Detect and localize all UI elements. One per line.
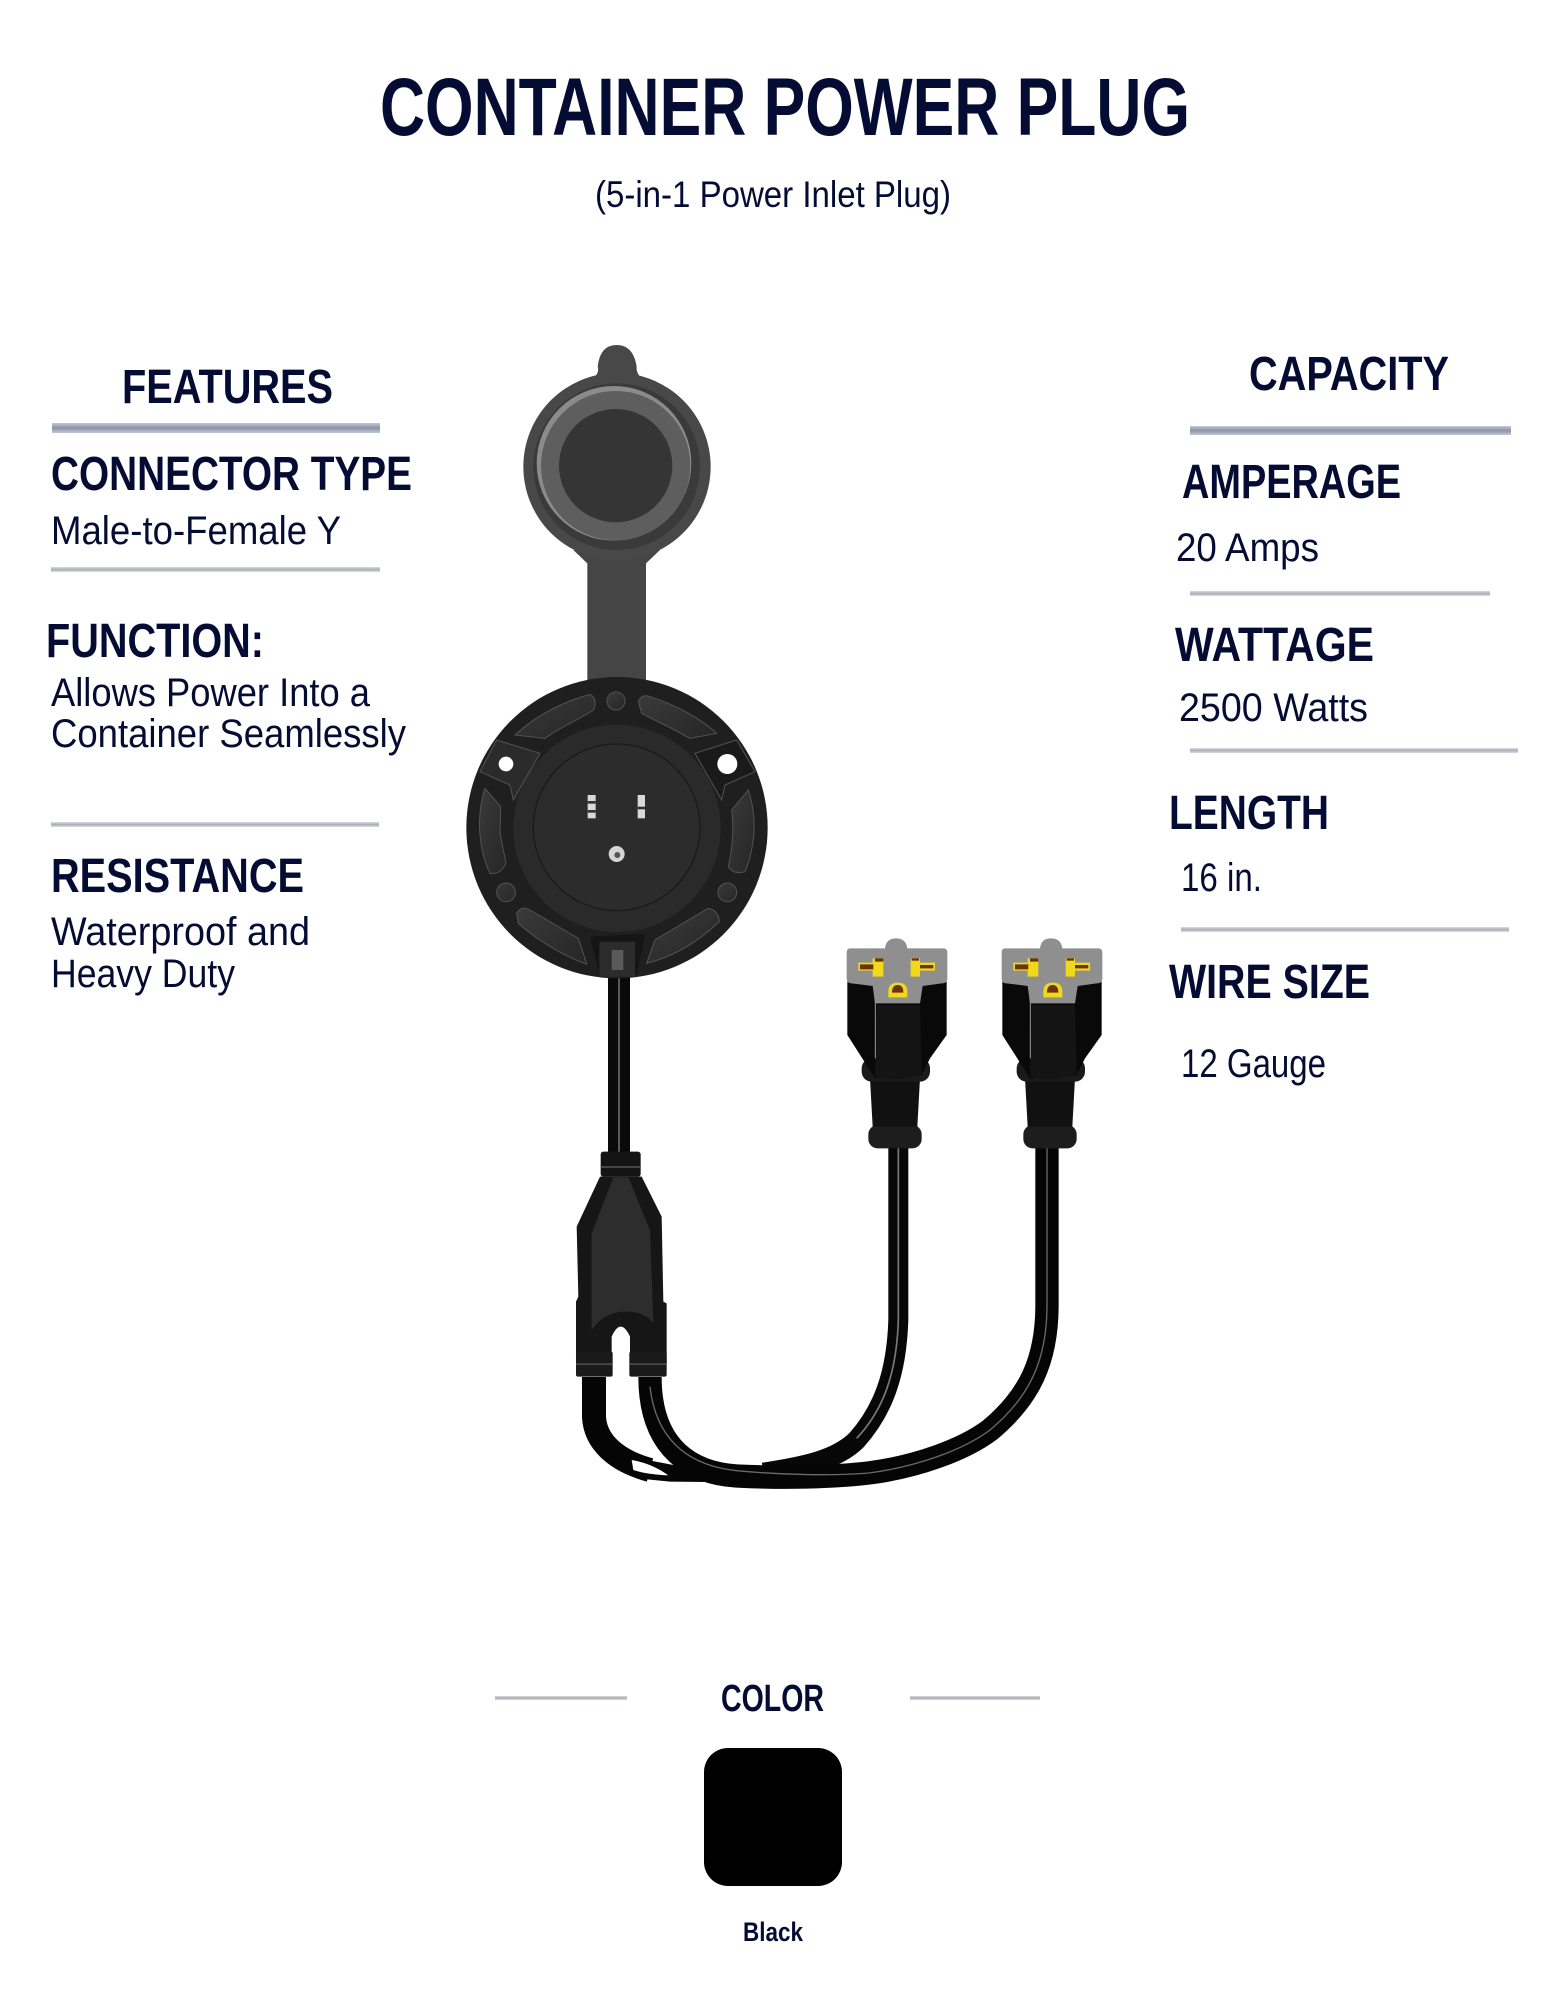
icon: plug 1: [847, 938, 947, 1148]
cords: [619, 973, 1047, 1477]
capacity: wattage: [1175, 619, 1374, 730]
capacity: length: [1169, 787, 1329, 900]
color name: Black: [743, 1917, 804, 1947]
cap disc: [523, 373, 711, 560]
feature: connector type: [51, 448, 412, 553]
cap tab: [595, 345, 640, 377]
feature: function: Allows Power Into a: [51, 671, 371, 715]
capacity: wattage: WATTAGE: [1175, 619, 1374, 672]
capacity: amperage: 20 Amps: [1176, 526, 1319, 570]
color heading: COLOR: [721, 1678, 824, 1720]
feature: connector type: CONNECTOR TYPE: [51, 448, 412, 501]
mounting holes: [499, 754, 737, 774]
socket pins: [588, 795, 645, 862]
panel: features: [46, 361, 412, 996]
icon: inlet cap and strap: [523, 345, 711, 683]
feature: function: FUNCTION:: [46, 615, 264, 668]
feature: function: [46, 615, 406, 756]
feature: resistance: Waterproof and: [51, 910, 310, 954]
capacity: amperage: [1176, 456, 1401, 570]
feature: resistance: Heavy Duty: [51, 952, 235, 996]
slots and mounts: [479, 692, 755, 964]
subtitle: (5-in-1 Power Inlet Plug): [595, 174, 951, 215]
capacity: wire size: WIRE SIZE: [1169, 956, 1370, 1009]
panel: capacity: [1169, 348, 1518, 1086]
capacity heading: CAPACITY: [1249, 348, 1449, 401]
feature: resistance: [51, 850, 310, 996]
junction body: [576, 1152, 667, 1377]
panel: color: [495, 1678, 1040, 1947]
capacity: wire size: [1169, 956, 1370, 1086]
feature: connector type: Male-to-Female Y: [51, 509, 341, 553]
socket recess: [533, 744, 700, 911]
bottom tab: [590, 934, 645, 977]
capacity: length: 16 in.: [1181, 856, 1262, 900]
flange disc: [466, 677, 768, 978]
icon: inlet flange: [466, 677, 768, 978]
title: CONTAINER POWER PLUG: [380, 62, 1190, 153]
cap strap: [573, 550, 660, 683]
left leg cord: [594, 1377, 650, 1470]
capacity: length: LENGTH: [1169, 787, 1329, 840]
raised ring: [513, 725, 721, 932]
feature: resistance: RESISTANCE: [51, 850, 304, 903]
feature: function: Container Seamlessly: [51, 712, 406, 756]
icon: plug 2: [1002, 938, 1102, 1148]
capacity: wattage: 2500 Watts: [1179, 686, 1368, 730]
icon: Y cable cords and junction: [576, 973, 1047, 1482]
capacity: amperage: AMPERAGE: [1182, 456, 1401, 509]
color swatch: [704, 1748, 842, 1886]
cable highlight: [632, 1460, 668, 1475]
left leg taper: [633, 1457, 707, 1482]
capacity: wire size: 12 Gauge: [1181, 1042, 1326, 1086]
features heading: FEATURES: [122, 361, 333, 414]
